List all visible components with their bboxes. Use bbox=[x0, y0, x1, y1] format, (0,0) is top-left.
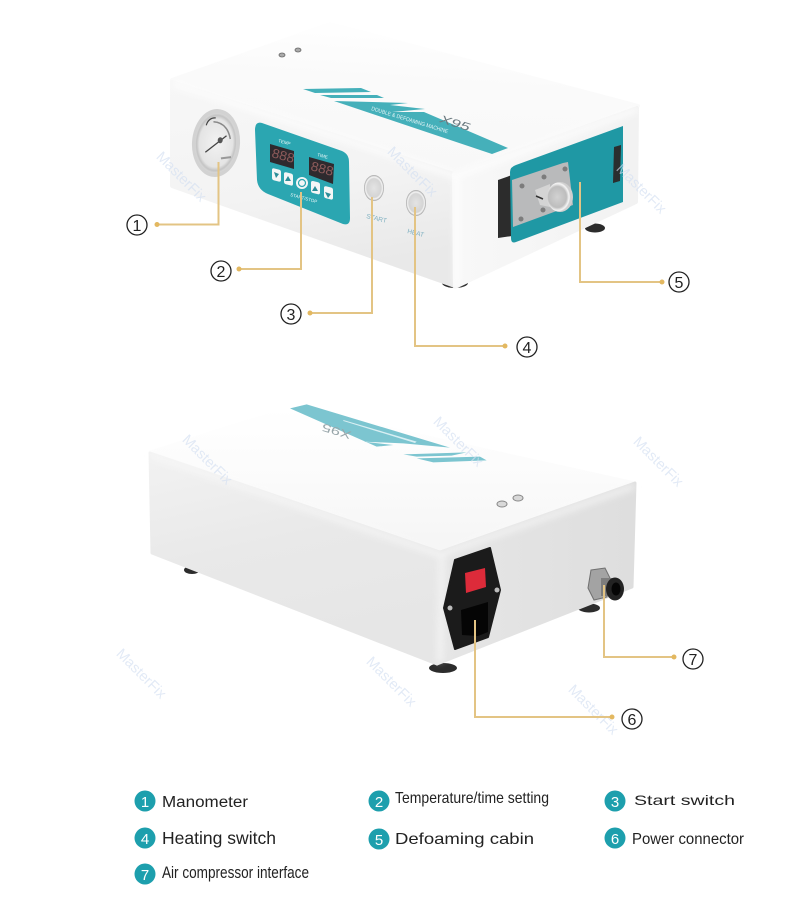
watermarks: MasterFix bbox=[630, 434, 687, 491]
temp display bbox=[270, 144, 294, 169]
watermarks: MasterFix bbox=[179, 432, 236, 489]
callout 6 bbox=[475, 620, 642, 729]
legend item 4: Heating switch bbox=[162, 828, 276, 848]
power module bbox=[444, 548, 500, 649]
time display bbox=[309, 157, 334, 184]
top face bbox=[150, 407, 635, 552]
legend item 6: 6 bbox=[611, 831, 619, 848]
legend item 5: 5 bbox=[375, 832, 383, 849]
gauge bbox=[190, 107, 242, 179]
heat label: HEAT bbox=[407, 228, 425, 239]
callout 6: 6 bbox=[628, 712, 637, 729]
callout 3: 3 bbox=[287, 307, 296, 324]
control panel: START/STOP bbox=[290, 192, 318, 204]
start label: START bbox=[366, 213, 387, 225]
device: rear view bbox=[150, 404, 635, 673]
control panel: TIME bbox=[317, 152, 328, 160]
watermarks: MasterFix bbox=[565, 682, 622, 739]
front face bbox=[172, 82, 455, 286]
legend item 2: Temperature/time setting bbox=[395, 790, 549, 807]
callout 5 bbox=[580, 182, 689, 292]
feet bbox=[205, 186, 605, 288]
red switch bbox=[465, 568, 486, 593]
top face bbox=[172, 24, 638, 174]
callout 7: 7 bbox=[689, 652, 698, 669]
start switch knob bbox=[364, 175, 387, 225]
defoaming cabin bbox=[498, 126, 623, 242]
legend item 4: 4 bbox=[141, 831, 149, 848]
legend item 6: Power connector bbox=[632, 831, 744, 848]
legend item 1: Manometer bbox=[162, 794, 248, 811]
watermarks: MasterFix bbox=[430, 414, 487, 471]
legend bbox=[134, 790, 744, 884]
device: front view bbox=[172, 24, 638, 288]
control panel: TEMP bbox=[278, 138, 291, 146]
legend item 7: Air compressor interface bbox=[162, 864, 309, 882]
air connector bbox=[588, 568, 624, 600]
callout 2 bbox=[211, 192, 301, 281]
callout 4 bbox=[415, 207, 537, 357]
logo stripes bbox=[290, 404, 487, 462]
watermarks bbox=[113, 144, 687, 739]
model name: X95 bbox=[437, 113, 473, 134]
legend item 5 bbox=[368, 828, 534, 850]
watermarks: MasterFix bbox=[113, 646, 170, 703]
callout 7 bbox=[604, 585, 703, 669]
control panel: 888 bbox=[309, 158, 335, 179]
legend item 3 bbox=[604, 790, 735, 812]
right face bbox=[454, 108, 637, 287]
right face bbox=[437, 483, 635, 664]
callout 2: 2 bbox=[217, 264, 226, 281]
legend item 3: Start switch bbox=[634, 792, 735, 808]
legend item 1 bbox=[134, 790, 248, 812]
legend item 3: 3 bbox=[611, 794, 619, 811]
callout 1: 1 bbox=[133, 218, 142, 235]
callout 3 bbox=[281, 197, 372, 324]
power button bbox=[296, 177, 308, 189]
model name: X95 bbox=[321, 420, 353, 441]
socket bbox=[461, 602, 488, 636]
callout 1 bbox=[127, 162, 218, 235]
panel buttons bbox=[272, 168, 333, 200]
screws bbox=[279, 48, 301, 57]
logo text: DOUBLE & DEFOAMING MACHINE bbox=[370, 106, 449, 135]
legend item 7 bbox=[134, 864, 309, 884]
legend item 1: 1 bbox=[141, 794, 149, 811]
edge highlights bbox=[175, 84, 636, 284]
control panel bbox=[255, 123, 350, 224]
legend item 2 bbox=[368, 790, 549, 812]
feet bbox=[184, 566, 600, 673]
control panel: 888 bbox=[270, 145, 296, 166]
left face bbox=[150, 453, 440, 664]
legend item 5: Defoaming cabin bbox=[395, 831, 534, 848]
callout 5: 5 bbox=[675, 275, 684, 292]
callout 4: 4 bbox=[523, 340, 532, 357]
watermarks: MasterFix bbox=[384, 144, 441, 201]
watermarks: MasterFix bbox=[153, 149, 210, 206]
edge highlights bbox=[154, 456, 632, 660]
heat switch knob bbox=[406, 190, 426, 239]
watermarks: MasterFix bbox=[613, 161, 670, 218]
screws bbox=[497, 495, 523, 507]
legend item 7: 7 bbox=[141, 867, 149, 884]
legend item 2: 2 bbox=[375, 794, 383, 811]
logo stripes bbox=[303, 88, 508, 154]
watermarks: MasterFix bbox=[363, 654, 420, 711]
legend item 6 bbox=[604, 828, 744, 848]
